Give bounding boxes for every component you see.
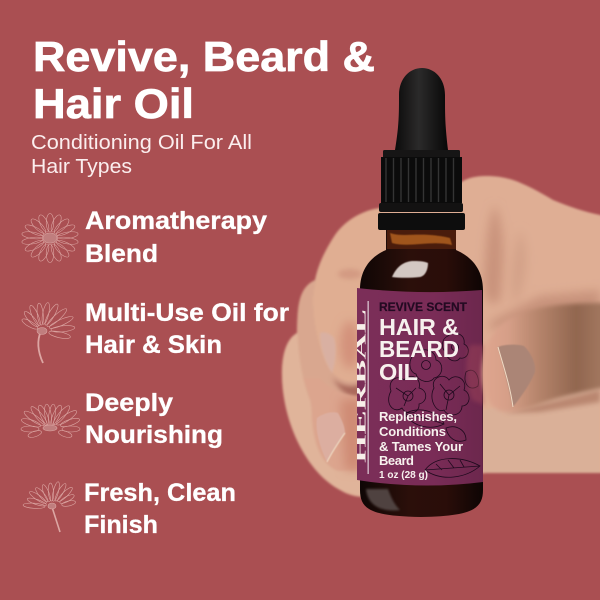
fingernail: middle (317, 412, 345, 462)
left finger outer (282, 333, 365, 497)
upper palm creases (484, 205, 503, 304)
subtitle (31, 132, 252, 178)
subtitle: Hair Types (31, 156, 132, 178)
infographic canvas (20, 40, 600, 534)
product label (352, 288, 483, 486)
title: Revive, Beard & (33, 33, 375, 80)
benefit: deeply nourishing: Nourishing (85, 421, 223, 449)
collar plate (383, 150, 460, 158)
scent name: REVIVE SCENT (379, 300, 468, 314)
label floral line art (389, 333, 480, 477)
second finger (298, 332, 357, 391)
icon: daisy on straight stem (23, 481, 76, 532)
benefit: aromatherapy blend: Blend (85, 240, 158, 268)
thumbnail edge (498, 347, 513, 407)
benefit: aromatherapy blend: Aromatherapy (85, 207, 267, 235)
title (33, 33, 375, 127)
lower ring upper (379, 203, 463, 212)
shoulder highlight (392, 261, 428, 278)
claims (379, 409, 463, 468)
palm shadow above thumb (490, 290, 600, 330)
icon: daisy side view (21, 404, 80, 439)
ridged collar (381, 157, 462, 203)
net weight: 1 oz (28 g) (379, 470, 428, 481)
glass body (360, 230, 483, 517)
claims: Beard (379, 453, 414, 468)
thumb body (482, 303, 600, 412)
benefit: deeply nourishing (85, 389, 223, 449)
thumb (466, 303, 600, 412)
benefit: fresh clean finish: Fresh, Clean (84, 479, 236, 507)
bottom glass reflection (366, 489, 400, 510)
lower palm (483, 385, 600, 473)
product name (379, 314, 459, 385)
finger gap shadow (333, 379, 357, 396)
brand name, rotated: HERBAL (352, 309, 370, 463)
title: Hair Oil (33, 80, 194, 127)
vertical rule (368, 301, 369, 474)
collar ridges (386, 158, 454, 202)
knuckle red (338, 269, 362, 279)
benefit: multi-use oil: Hair & Skin (85, 331, 222, 359)
hand behind bottle (270, 170, 600, 510)
product name: OIL (379, 359, 418, 385)
icon: daisy on curved stem (21, 302, 75, 363)
claims: & Tames Your (379, 439, 463, 454)
dropper bottle (360, 68, 483, 517)
benefit: multi-use oil (85, 299, 289, 359)
claims: Conditions (379, 424, 446, 439)
index finger (313, 208, 400, 381)
fingernail: index (320, 332, 336, 373)
thumb translucent edge over label (466, 345, 484, 405)
benefit: fresh clean finish: Finish (84, 511, 158, 539)
rubber bulb (395, 68, 448, 150)
lower ring (378, 213, 465, 230)
product name: HAIR & (379, 314, 459, 340)
benefit: deeply nourishing: Deeply (85, 389, 173, 417)
benefit: multi-use oil: Multi-Use Oil for (85, 299, 289, 327)
amber neck (387, 230, 456, 249)
middle finger (311, 394, 357, 470)
subtitle: Conditioning Oil For All (31, 132, 252, 154)
product name: BEARD (379, 336, 459, 362)
skin base (296, 174, 600, 498)
thumbnail (498, 345, 535, 407)
benefit: aromatherapy blend (85, 207, 267, 268)
benefit: fresh clean finish (84, 479, 236, 539)
icon: daisy front view (21, 213, 79, 263)
claims: Replenishes, (379, 409, 457, 424)
